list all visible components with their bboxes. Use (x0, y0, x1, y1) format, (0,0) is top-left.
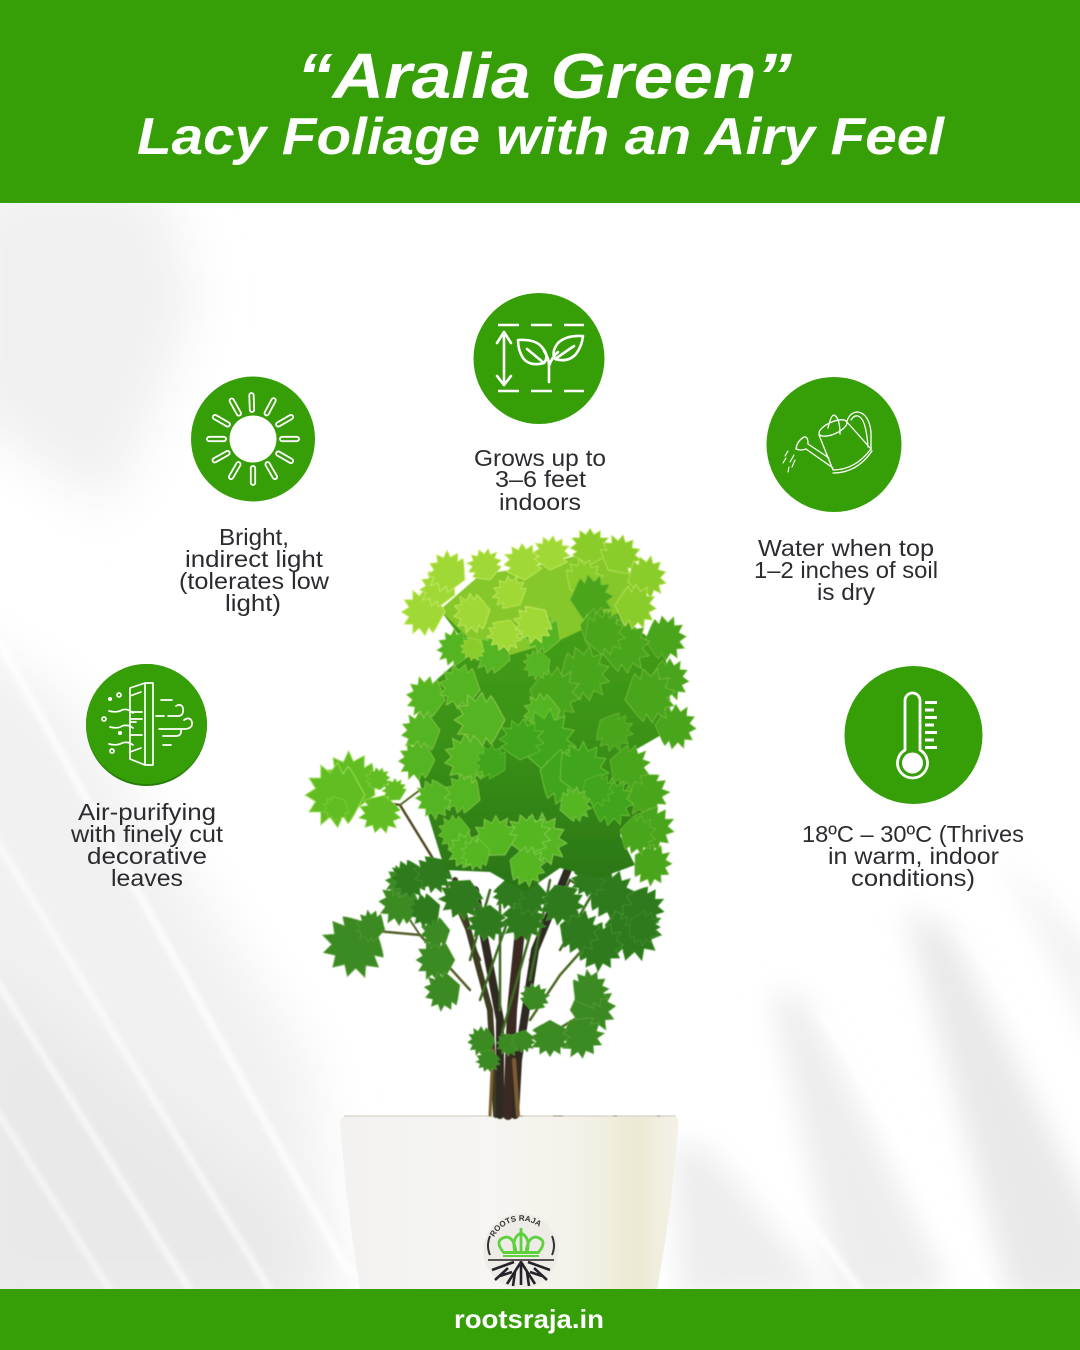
icon: thermometer (844, 666, 982, 804)
label: watering (754, 535, 938, 605)
label: light: indirect light (185, 546, 324, 572)
foliage core mass (412, 550, 670, 892)
feature: watering (754, 377, 938, 605)
left branch leaves (305, 742, 411, 838)
label: watering: is dry (817, 579, 875, 605)
label: watering: Water when top (758, 535, 934, 561)
icon: height plant (474, 293, 604, 424)
label: height: Grows up to (474, 445, 606, 471)
feature: height (474, 293, 606, 515)
label: light: light) (225, 590, 281, 616)
label: air purifying: leaves (111, 865, 183, 891)
label: temperature: in warm, indoor (828, 843, 999, 869)
label: air purifying: decorative (87, 843, 207, 869)
label: height: 3–6 feet (495, 466, 587, 492)
label: temperature (802, 821, 1024, 891)
plant illustration (305, 526, 698, 1115)
label: height: indoors (499, 489, 581, 515)
footer banner (0, 1289, 1080, 1350)
lower outer leaves (310, 857, 618, 1076)
pot illustration (340, 1116, 678, 1289)
feature: temperature (802, 666, 1024, 891)
label: air purifying: with finely cut (70, 821, 224, 847)
icon: sun (191, 376, 315, 502)
label: light (179, 524, 330, 616)
upper crown leaves (401, 534, 572, 656)
feature: air purifying (70, 664, 224, 891)
feature: light (179, 376, 330, 616)
title: plant name: “Aralia Green” (297, 40, 792, 112)
label: temperature: 18ºC – 30ºC (Thrives (802, 821, 1024, 847)
pot logo badge (484, 1215, 555, 1286)
stems and trunk (345, 790, 640, 1115)
pot logo badge: ROOTS RAJA (490, 1215, 540, 1237)
label: temperature: conditions) (851, 865, 975, 891)
label: air purifying: Air-purifying (78, 799, 216, 825)
label: light: Bright, (219, 524, 289, 550)
icon: air filter (86, 664, 207, 786)
deep mid leaves (525, 614, 698, 893)
footer website: rootsraja.in (454, 1304, 604, 1334)
upper crown mass (440, 550, 640, 655)
header banner (0, 0, 1080, 203)
label: height (474, 445, 606, 515)
label: air purifying (70, 799, 224, 891)
label: watering: 1–2 inches of soil (754, 557, 938, 583)
icon: watering can (766, 377, 902, 512)
subtitle: Lacy Foliage with an Airy Feel (137, 108, 946, 166)
label: light: (tolerates low (179, 568, 330, 594)
